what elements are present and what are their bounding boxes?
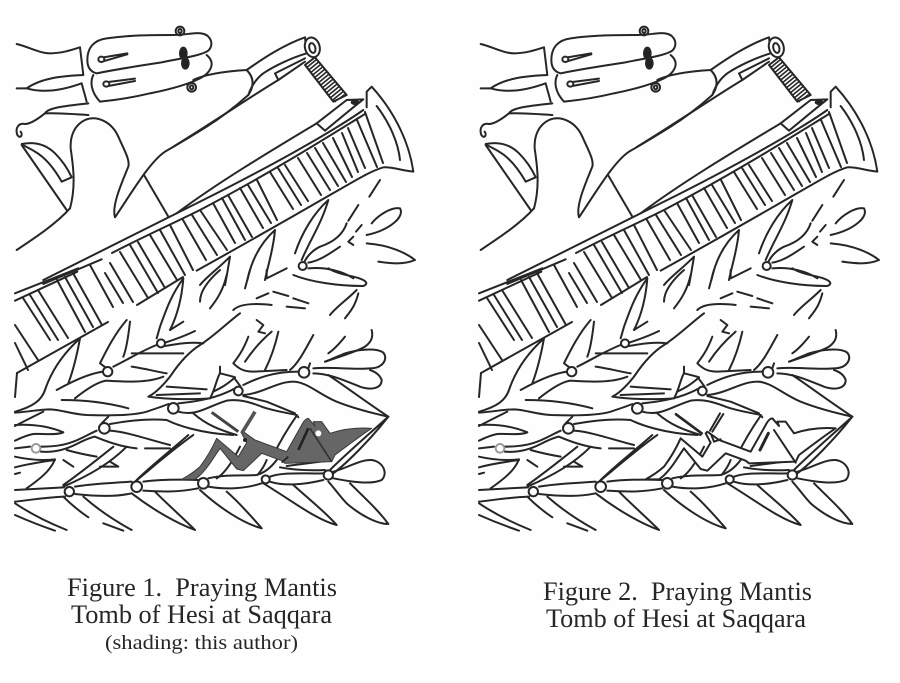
caption: figure 1: Figure 1. Praying Mantis xyxy=(67,573,337,602)
figure 2 drawing: tomb relief with unshaded mantis xyxy=(479,27,879,531)
caption: figure 1 xyxy=(67,573,337,654)
figure 1 drawing: tomb relief with shaded mantis xyxy=(15,27,415,531)
caption: figure 1: Tomb of Hesi at Saqqara xyxy=(71,600,332,629)
caption: figure 2 xyxy=(543,577,812,633)
caption: figure 1: (shading: this author) xyxy=(105,632,298,654)
caption: figure 2: Tomb of Hesi at Saqqara xyxy=(546,604,806,633)
caption: figure 2: Figure 2. Praying Mantis xyxy=(543,577,812,606)
outlined praying mantis xyxy=(646,413,836,479)
shaded praying mantis xyxy=(182,412,372,479)
